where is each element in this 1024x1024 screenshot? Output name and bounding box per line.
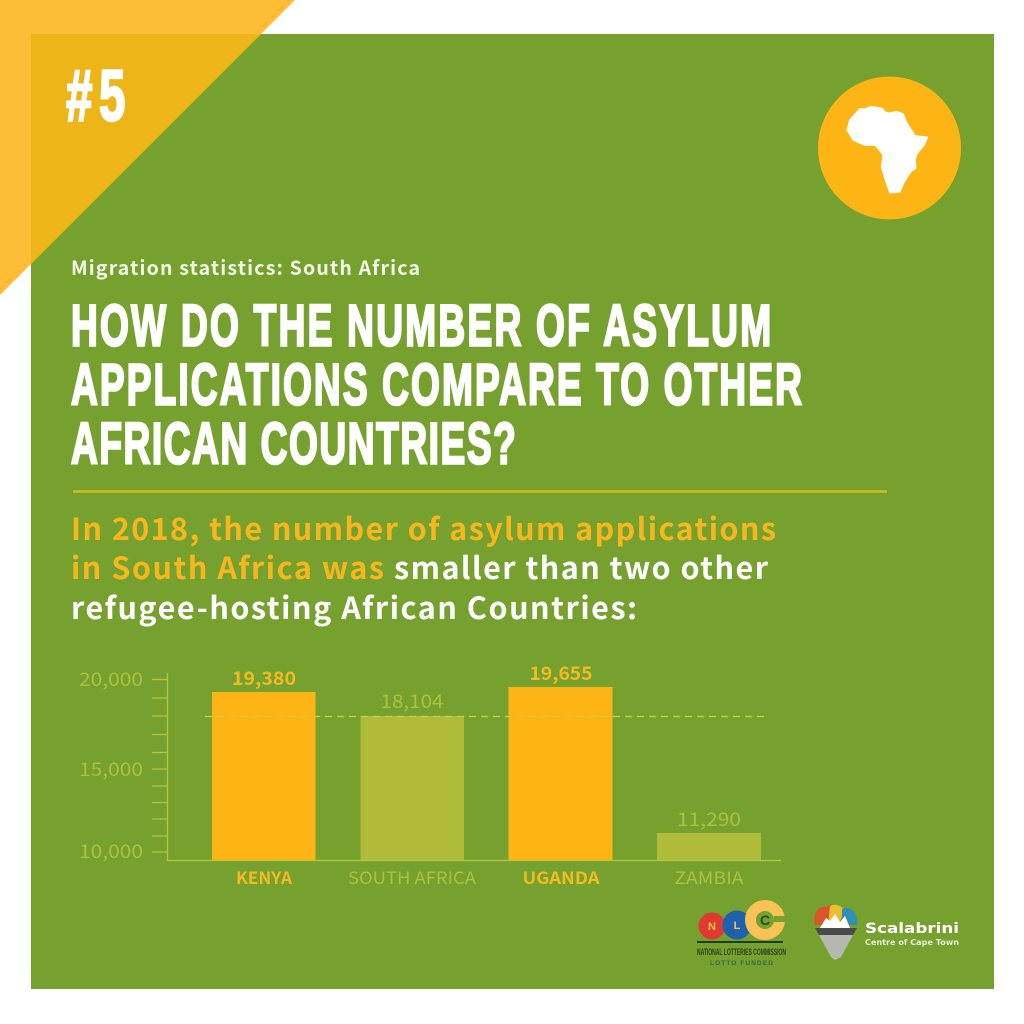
title: [71, 294, 802, 477]
intro text: in South Africa was: [71, 544, 384, 588]
intro text: In 2018, the number of asylum applications: [71, 505, 776, 549]
icon: Africa in circle: [818, 76, 961, 220]
title: HOW DO THE NUMBER OF ASYLUM: [71, 294, 771, 359]
axes and ticks: [152, 673, 781, 860]
reference line: [205, 716, 765, 718]
logo: NLC: C: [760, 912, 770, 928]
intro text: smaller than two other: [394, 544, 769, 588]
logo: Scalabrini: Centre of Cape Town: [865, 938, 959, 947]
value labels: 19,655: [530, 659, 592, 686]
logo: NLC: N: [708, 921, 716, 933]
country labels: KENYA: [236, 864, 292, 889]
title: AFRICAN COUNTRIES?: [71, 412, 516, 477]
y axis labels: 10,000: [79, 837, 143, 864]
y axis labels: [79, 665, 143, 864]
logo: Scalabrini: Scalabrini: [865, 921, 959, 937]
intro text: refugee-hosting African Countries:: [71, 584, 637, 628]
bar chart: [79, 659, 781, 889]
logo: Scalabrini: [814, 905, 959, 960]
logo: NLC: [697, 906, 787, 967]
y axis labels: 20,000: [79, 665, 143, 692]
divider: [73, 490, 887, 493]
logo: NLC: NATIONAL LOTTERIES COMMISSION: [697, 947, 786, 957]
logo: NLC: LOTTO FUNDED: [710, 960, 773, 967]
value labels: 18,104: [380, 687, 444, 714]
bar: Uganda: [508, 687, 612, 860]
y axis labels: 15,000: [79, 755, 143, 782]
badge number: #5: [66, 56, 125, 136]
value labels: 11,290: [677, 805, 741, 832]
logo: NLC: L: [734, 920, 741, 932]
country labels: [236, 864, 744, 889]
value labels: 19,380: [232, 664, 296, 691]
bar: Kenya: [212, 692, 316, 860]
value labels: [232, 659, 741, 832]
corner triangle: [0, 0, 295, 295]
bar: South Africa: [360, 716, 464, 860]
title: APPLICATIONS COMPARE TO OTHER: [71, 353, 802, 418]
subtitle: Migration statistics: South Africa: [71, 252, 420, 281]
bar: Zambia: [657, 833, 761, 860]
country labels: ZAMBIA: [674, 864, 744, 889]
intro text: [71, 505, 776, 628]
country labels: SOUTH AFRICA: [348, 864, 477, 889]
country labels: UGANDA: [522, 864, 600, 889]
